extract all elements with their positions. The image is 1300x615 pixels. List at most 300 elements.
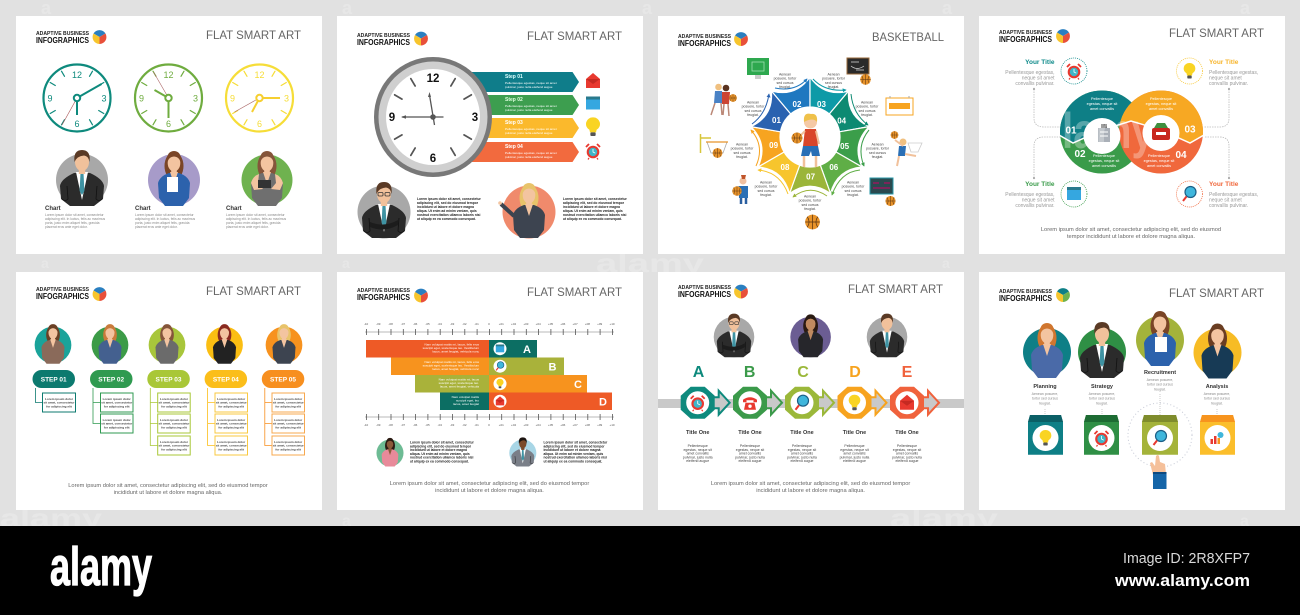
step C: egestas, neque sit <box>788 448 816 452</box>
step 04: Lorem ipsum dolor <box>217 418 246 422</box>
step D: amet convallis <box>843 452 866 456</box>
block: top right title <box>1209 59 1258 87</box>
step E: egestas, neque sit <box>893 448 921 452</box>
step E <box>890 364 939 463</box>
label: Analysis: Analysis <box>1206 384 1228 390</box>
text: chart 2: porta, justo enim aliquet felis, gravida <box>135 221 190 225</box>
step B: Pellentesque <box>740 444 760 448</box>
text: chart 3: Chart <box>226 206 242 212</box>
text labels: sed cursus <box>869 151 886 155</box>
step 03: STEP 03 <box>156 376 182 384</box>
top axis: +06 <box>560 322 566 326</box>
background watermark: a <box>1240 513 1249 530</box>
footer text: Lorem ipsum dolor sit amet, consectetur adipiscing elit, sed do eiusmod <box>1041 227 1221 233</box>
label: Recruitment: Recruitment <box>1144 370 1176 376</box>
label: Strategy: Strategy <box>1091 384 1114 390</box>
text block left: adipiscing elit, sed do eiusmod tempor <box>410 444 472 448</box>
text labels: posuere, tortor <box>842 185 865 189</box>
venn diagram: 03 <box>1184 124 1196 136</box>
box: olive <box>1142 415 1178 455</box>
icon: chalkboard with ball <box>847 58 871 85</box>
step 04: sit amet, consectetur <box>216 444 247 448</box>
text block left: ut aliquip ex ea commodo consequat. <box>410 460 469 464</box>
large clock <box>374 57 492 177</box>
block: bottom right title: neque sit amet <box>1209 198 1242 204</box>
yellow clock: 3 <box>284 94 289 104</box>
icon: alarm clock <box>586 144 600 160</box>
box: yellow <box>1200 415 1235 455</box>
person: Recruitment <box>1136 311 1184 366</box>
logo: ADAPTIVE BUSINESS <box>357 288 410 294</box>
text block left: ut aliquip ex ea commodo consequat. <box>417 217 476 221</box>
step E: Pellentesque <box>897 444 917 448</box>
step B: B <box>744 364 755 381</box>
step 03: sit amet, consectetur <box>159 401 190 405</box>
step D: Pellentesque <box>844 444 865 448</box>
heading: FLAT SMART ART <box>848 282 944 296</box>
logo: INFOGRAPHICS <box>36 292 90 301</box>
logo: INFOGRAPHICS <box>357 38 411 47</box>
text block left: nostrud exercitation ullamco laboris nisi <box>417 213 480 217</box>
step ribbon 04 <box>460 142 579 162</box>
step 04: sit amet, consectetur <box>216 422 247 426</box>
step 05: sit amet, consectetur <box>273 444 304 448</box>
text labels: Aenean <box>779 72 791 76</box>
icon: dark scoreboard with ball <box>870 178 896 206</box>
alamy logo: alamy <box>50 537 152 597</box>
block: bottom left title: Your Title <box>1025 181 1055 188</box>
top axis: +05 <box>548 322 553 326</box>
text labels: Aenean <box>736 142 748 146</box>
teal clock: 6 <box>74 119 80 129</box>
text labels: feugiat. <box>747 113 759 117</box>
person 3 <box>149 324 185 364</box>
text block left: Lorem ipsum dolor sit amet, consectetur <box>417 197 481 201</box>
label: Strategy <box>1089 384 1115 405</box>
step 01: sit amet, consectetur <box>44 401 75 405</box>
footer text: Lorem ipsum dolor sit amet, consectetur adipiscing elit, sed do eiusmod tempor <box>711 481 910 487</box>
step A: amet convallis <box>687 452 709 456</box>
text block right: adipiscing elit, sed do eiusmod tempor <box>563 201 625 205</box>
step B <box>733 364 782 463</box>
text block left: adipiscing elit, sed do eiusmod tempor <box>417 201 479 205</box>
label: Planning <box>1032 384 1058 405</box>
icon: basketball <box>805 215 820 229</box>
logo: ADAPTIVE BUSINESS <box>36 31 89 37</box>
text block right: aliqua. Ut enim ad minim veniam, quis <box>563 209 623 213</box>
background watermark: a <box>942 255 950 271</box>
top axis: +02 <box>511 322 516 326</box>
bar C <box>415 375 587 392</box>
text labels: sed cursus <box>825 81 842 85</box>
step 03 <box>147 370 190 455</box>
panel: diverging bars <box>337 272 643 510</box>
text block right: ut aliquip ex ea commodo consequat. <box>544 460 602 464</box>
green clock: 12 <box>163 70 174 80</box>
dotted selection circle <box>1128 403 1192 467</box>
step 02: for adipiscing elit <box>104 404 130 408</box>
bottom axis: +05 <box>548 423 553 427</box>
text block right: ut aliquip ex ea commodo consequat. <box>563 217 622 221</box>
top axis: -05 <box>425 322 430 326</box>
star diagram: 06 <box>829 163 839 172</box>
text labels: posuere, tortor <box>742 105 765 109</box>
footer text: incididunt ut labore et dolore magna aliqua. <box>756 488 865 494</box>
bar B: Nam volutpat mattis mi, lacus, felis eros <box>424 360 479 364</box>
text: chart 1: placerat eros ante eget dolor. <box>45 225 88 229</box>
step E: eleifend augue <box>896 459 919 463</box>
bottom axis: -07 <box>401 423 405 427</box>
logo <box>357 32 428 47</box>
top axis: +01 <box>499 322 504 326</box>
step 03: sit amet, consectetur <box>159 444 190 448</box>
text block right: adipiscing elit, sed do eiusmod tempor <box>544 444 605 448</box>
step 05 <box>262 370 304 455</box>
heading: FLAT SMART ART <box>206 28 302 42</box>
icon: envelope <box>586 73 600 88</box>
star diagram: 03 <box>817 100 826 109</box>
bar D: lacus, amet feugiat <box>453 402 479 406</box>
bar A <box>366 340 537 358</box>
person: woman on purple <box>148 151 200 206</box>
top axis: -03 <box>450 322 455 326</box>
text: chart 3 <box>226 206 286 229</box>
step 02: Lorem ipsum dolor <box>103 397 131 401</box>
bottom axis: +07 <box>573 423 578 427</box>
step 05: for adipiscing elit <box>275 425 301 429</box>
bottom axis: -03 <box>450 423 455 427</box>
top axis: -06 <box>413 322 418 326</box>
top axis: -02 <box>462 322 467 326</box>
icon: two players <box>711 84 737 116</box>
text labels: sed cursus <box>734 151 751 155</box>
person: blonde woman <box>498 183 556 238</box>
bottom axis: -09 <box>376 423 381 427</box>
bar D <box>440 392 612 410</box>
logo: ADAPTIVE BUSINESS <box>678 285 731 291</box>
text labels: Aenean <box>747 100 759 104</box>
bottom axis: -04 <box>438 423 442 427</box>
large clock: 3 <box>472 112 478 124</box>
label: Recruitment: feugiat. <box>1154 387 1166 391</box>
block: bottom right title: convallis pulvinar. <box>1209 203 1248 209</box>
venn diagram: Pellentesque <box>1093 154 1115 158</box>
star diagram: 09 <box>769 141 779 150</box>
text labels: posuere, tortor <box>799 199 822 203</box>
background watermark: a <box>41 255 49 271</box>
step D: eleifend augue <box>843 459 866 463</box>
bottom axis: -10 <box>364 423 368 427</box>
footer text: Lorem ipsum dolor sit amet, consectetur adipiscing elit, sed do eiusmod tempor <box>68 483 268 489</box>
step C: eleifend augue <box>791 459 814 463</box>
teal clock <box>44 64 110 132</box>
step 04: for adipiscing elit <box>218 447 244 451</box>
step B: eleifend augue <box>739 459 762 463</box>
panel: four titles venn <box>979 16 1285 254</box>
step ribbon 03: Pellentesque egestas, neque sit amet <box>505 127 557 131</box>
text labels: sed cursus <box>845 189 862 193</box>
text: chart 1: Chart <box>45 206 61 212</box>
top axis: +09 <box>597 322 603 326</box>
step 04: for adipiscing elit <box>218 404 244 408</box>
dashed leader lines <box>1045 394 1217 420</box>
teal clock: 9 <box>47 94 53 104</box>
logo: INFOGRAPHICS <box>999 294 1053 303</box>
large clock: 12 <box>427 73 439 85</box>
step 02: sit amet, consectetur <box>101 401 133 405</box>
step 02: Lorem ipsum dolor <box>103 418 131 422</box>
venn diagram: amet convallis <box>1147 164 1171 168</box>
block: top right title: Your Title <box>1209 59 1239 66</box>
venn diagram: egestas, neque sit <box>1087 102 1118 106</box>
step 03: for adipiscing elit <box>161 425 187 429</box>
step 02: sit amet, consectetur <box>101 422 133 426</box>
logo: ADAPTIVE BUSINESS <box>999 289 1052 295</box>
step 05: STEP 05 <box>270 376 296 384</box>
step E: pulvinar, justo nulla <box>892 455 922 459</box>
text labels: Aenean <box>760 180 772 184</box>
text labels: feugiat. <box>861 113 873 117</box>
venn diagram: egestas, neque sit <box>1089 159 1120 163</box>
icon: girl with ball <box>732 175 748 204</box>
step B: egestas, neque sit <box>736 448 764 452</box>
bar C: lacus, amet feugiat, vehicula <box>440 384 479 388</box>
block: top right title: neque sit amet <box>1209 76 1242 82</box>
block: bottom left title <box>1005 181 1055 209</box>
logo: ADAPTIVE BUSINESS <box>999 30 1052 36</box>
star diagram <box>751 77 869 193</box>
panel: process timeline <box>658 272 964 510</box>
bottom axis: +04 <box>536 423 541 427</box>
background watermark: alamy <box>890 503 999 533</box>
person: woman on green <box>242 151 292 206</box>
bottom axis: +10 <box>609 423 615 427</box>
star diagram: 04 <box>837 116 847 126</box>
block: top left title: Pellentesque egestas, <box>1005 70 1054 76</box>
text: chart 3: placerat eros ante eget dolor. <box>226 225 269 229</box>
label: Planning: feugiat. <box>1039 401 1051 405</box>
text labels: feugiat. <box>760 193 772 197</box>
logo: ADAPTIVE BUSINESS <box>36 287 89 293</box>
heading: FLAT SMART ART <box>527 285 623 299</box>
bar D: Nam volutpat mattis <box>452 395 479 399</box>
step 01 <box>32 370 76 412</box>
step ribbon 04: pulvinar, justo nulla eleifend augue <box>505 155 553 159</box>
step 02: for adipiscing elit <box>104 425 130 429</box>
text labels: sed cursus <box>777 81 794 85</box>
text labels: feugiat. <box>872 155 883 159</box>
bottom axis: +01 <box>499 423 504 427</box>
step 04 <box>205 370 248 455</box>
top axis: -04 <box>438 322 442 326</box>
venn diagram: 04 <box>1175 150 1187 161</box>
step 03: for adipiscing elit <box>161 447 187 451</box>
star diagram: 02 <box>793 100 802 109</box>
label: Recruitment: tortor sed cursus <box>1147 383 1173 387</box>
logo <box>678 32 748 48</box>
bar D: suscipit eget, leo <box>456 398 479 402</box>
step 05: for adipiscing elit <box>275 404 301 408</box>
background watermark: alamy <box>0 503 103 533</box>
label: Planning: tortor sed cursus <box>1032 397 1058 401</box>
step E: E <box>902 364 913 381</box>
grey band <box>658 399 964 408</box>
bottom axis: -06 <box>413 423 418 427</box>
person: Planning <box>1023 323 1071 378</box>
step A: Pellentesque <box>688 444 708 448</box>
top axis: -10 <box>364 322 368 326</box>
text: chart 1: Lorem ipsum dolor sit amet, consectetur <box>45 213 105 217</box>
label: Strategy: feugiat. <box>1096 401 1108 405</box>
bottom axis: +08 <box>585 423 590 427</box>
text block left: aliqua. Ut enim ad minim veniam, quis <box>417 209 477 213</box>
icon: magnifier in dotted circle <box>1176 181 1202 207</box>
icon: bulb in dotted circle <box>1176 58 1202 84</box>
large clock: 6 <box>430 153 436 165</box>
text block right: nostrud exercitation ullamco laboris nisi <box>544 456 607 460</box>
bottom axis: -08 <box>388 423 393 427</box>
heading: FLAT SMART ART <box>1169 26 1265 40</box>
text labels: feugiat. <box>828 85 839 89</box>
person: man with glasses <box>358 182 410 238</box>
label: Strategy: Aenean posuere, <box>1089 392 1115 396</box>
bar A: suscipit eget, scelerisque leo. Vestibulum <box>423 346 479 350</box>
top axis: -07 <box>401 322 405 326</box>
bar A: A <box>523 344 531 356</box>
step 04: Lorem ipsum dolor <box>217 397 246 401</box>
bottom axis <box>364 417 615 427</box>
text block left: Lorem ipsum dolor sit amet, consectetur <box>410 440 474 444</box>
step A: egestas, neque sit <box>683 448 712 452</box>
watermark over diagram: lamy <box>1062 103 1154 159</box>
venn diagram: 02 <box>1074 149 1086 160</box>
large clock: 9 <box>389 112 395 124</box>
logo: INFOGRAPHICS <box>357 293 411 302</box>
text labels <box>731 72 890 211</box>
yellow clock: 6 <box>257 119 262 129</box>
bar B <box>391 358 564 375</box>
label: Planning: Aenean posuere, <box>1032 392 1058 396</box>
logo: INFOGRAPHICS <box>999 35 1053 44</box>
footer text: tempor incididunt ut labore et dolore magna aliqua. <box>1067 234 1195 240</box>
bottom axis: +09 <box>597 423 603 427</box>
box: green <box>1084 415 1119 455</box>
label: Planning: Planning <box>1033 384 1057 390</box>
text block right: Lorem ipsum dolor sit amet, consectetur <box>563 197 627 201</box>
step 02: STEP 02 <box>98 376 125 384</box>
text: chart 2 <box>135 206 195 229</box>
block: top right title: Pellentesque egestas, <box>1209 70 1258 76</box>
text: chart 2: adipiscing elit. In luctus, felis ac maximus <box>135 217 195 221</box>
block: bottom left title: Pellentesque egestas, <box>1005 192 1054 198</box>
step A: eleifend augue <box>686 459 709 463</box>
connectors <box>1033 88 1230 179</box>
text labels: Aenean <box>861 100 873 104</box>
step ribbon 03 <box>460 118 579 138</box>
step ribbon 03: pulvinar, justo nulla eleifend augue <box>505 131 553 135</box>
step A: Title One <box>686 430 709 436</box>
venn diagram <box>1059 90 1204 174</box>
top axis: +03 <box>523 322 529 326</box>
text labels: Aenean <box>847 180 859 184</box>
step A <box>681 364 730 463</box>
text labels: feugiat. <box>736 155 748 159</box>
text labels: Aenean <box>827 72 840 76</box>
green clock <box>135 64 202 132</box>
footer text: incididunt ut labore et dolore magna aliqua. <box>435 488 544 494</box>
panel: big clock with steps <box>337 16 643 254</box>
yellow clock <box>226 64 293 132</box>
logo: INFOGRAPHICS <box>678 290 732 299</box>
person: woman <box>790 314 831 357</box>
top axis: -01 <box>475 322 479 326</box>
step ribbon 01 <box>460 72 579 92</box>
step D: pulvinar, justo nulla <box>840 455 869 459</box>
text: chart 3: porta, justo enim aliquet felis, gravida <box>226 221 281 225</box>
bottom axis: 0 <box>488 423 490 427</box>
image id: Image ID: 2R8XFP7 <box>1123 551 1250 567</box>
heading: FLAT SMART ART <box>206 284 302 298</box>
venn diagram: amet convallis <box>1090 107 1114 111</box>
step ribbon 02: Pellentesque egestas, neque sit amet <box>505 104 557 108</box>
text labels: posuere, tortor <box>822 77 846 81</box>
block: bottom left title: neque sit amet <box>1022 198 1055 204</box>
center player <box>782 109 838 167</box>
step 02 <box>90 370 133 433</box>
venn diagram: Pellentesque <box>1091 97 1113 101</box>
block: top left title: convallis pulvinar. <box>1015 81 1054 87</box>
step 05: for adipiscing elit <box>275 447 301 451</box>
text block right: nostrud exercitation ullamco laboris nisi <box>563 213 626 217</box>
step ribbon 02: pulvinar, justo nulla eleifend augue <box>505 108 553 112</box>
text block right: aliqua. Ut enim ad minim veniam, quis <box>544 452 603 456</box>
text block left: incididunt ut labore et dolore magna <box>410 448 467 452</box>
person: man with glasses <box>714 314 754 357</box>
hand pointer <box>1150 455 1166 489</box>
bar A: Nam volutpat mattis mi, lacus, felis eros <box>424 342 479 346</box>
block: bottom right title: Your Title <box>1209 181 1239 188</box>
step ribbon 04: Step 04 <box>505 144 523 150</box>
heading: BASKETBALL <box>872 30 944 44</box>
icon: bulb <box>586 117 600 136</box>
block: top left title: Your Title <box>1025 59 1055 66</box>
text: chart 2: Lorem ipsum dolor sit amet, consectetur <box>135 213 195 217</box>
box: teal <box>1028 415 1063 455</box>
text: chart 3: adipiscing elit. In luctus, felis ac maximus <box>226 217 286 221</box>
step B: Title One <box>738 430 762 436</box>
step B: amet convallis <box>739 452 761 456</box>
icon: calendar <box>586 96 600 110</box>
text labels: feugiat. <box>847 193 859 197</box>
bottom axis: -01 <box>475 423 479 427</box>
person 2 <box>92 324 128 364</box>
label: Analysis: feugiat. <box>1211 401 1223 405</box>
text labels: feugiat. <box>779 85 791 89</box>
step 03: Lorem ipsum dolor <box>160 440 189 444</box>
text block left: nostrud exercitation ullamco laboris nisi <box>410 456 473 460</box>
step D: D <box>849 364 861 381</box>
logo: ADAPTIVE BUSINESS <box>678 34 731 40</box>
bottom axis: +06 <box>560 423 566 427</box>
text labels: posuere, tortor <box>774 77 797 81</box>
block: top left title: neque sit amet <box>1022 76 1055 82</box>
bar C: suscipit eget, scelerisque leo. <box>439 381 479 385</box>
person: man on grey <box>56 150 108 206</box>
person: woman <box>376 438 404 467</box>
person 1 <box>35 324 71 364</box>
logo <box>357 288 428 302</box>
label: Analysis <box>1204 384 1230 405</box>
